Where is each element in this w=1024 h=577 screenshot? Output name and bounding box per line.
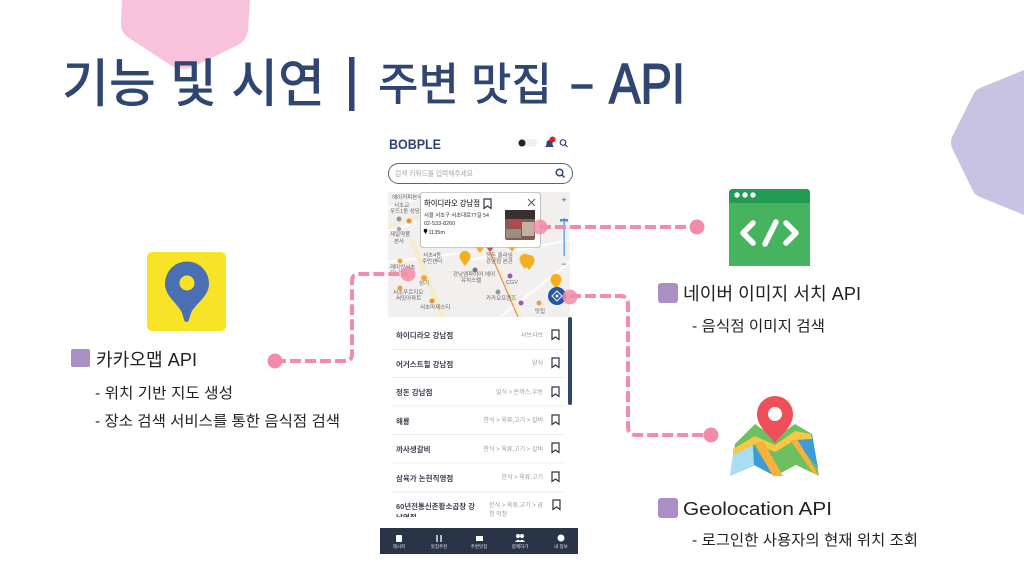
decorative purple shape xyxy=(951,70,1024,215)
text block: naver image search API: 네이버 이미지 서치 API xyxy=(683,284,861,304)
map: 제일약품 xyxy=(390,230,410,238)
restaurant list: 창 막창 xyxy=(489,510,508,518)
map: 주민센터 xyxy=(422,257,442,265)
text block: kakao map API: - 위치 기반 지도 생성 xyxy=(95,385,233,402)
place popup: 하이디라오 강남점 xyxy=(424,198,480,208)
text block: geolocation API xyxy=(658,498,918,549)
zoom slider: + xyxy=(561,195,567,205)
map: 강남엠파이어 헤어 xyxy=(453,270,495,278)
restaurant list: 정돈 강남점 xyxy=(396,387,433,397)
text block: kakao map API: - 장소 검색 서비스를 통한 음식점 검색 xyxy=(95,413,340,430)
list scrollbar xyxy=(568,317,572,405)
text block: naver image search API: - 음식점 이미지 검색 xyxy=(692,318,825,335)
arrow: naver image connector xyxy=(532,220,704,234)
restaurant list: 삼육가 논현직영점 xyxy=(396,473,453,483)
restaurant list: 한식 > 육류,고기 > 갈비 xyxy=(483,445,543,453)
map: 본사 xyxy=(394,237,404,245)
place popup: 서울 서초구 서초대로77길 54 xyxy=(424,211,489,219)
text block: naver image search API xyxy=(658,283,861,335)
place popup: 1135m xyxy=(428,230,445,236)
bottom navigation bar: 레시피 xyxy=(393,543,405,550)
app header xyxy=(389,136,568,152)
bottom navigation bar xyxy=(380,528,578,554)
zoom slider xyxy=(560,195,568,269)
map: 강남점 본관 xyxy=(486,257,513,265)
restaurant list: 일식 > 돈까스,우동 xyxy=(496,388,543,396)
map: 래미안서초 xyxy=(390,263,415,271)
text block: kakao map API: 카카오맵 API xyxy=(96,350,197,370)
map: 카카오프렌즈 xyxy=(486,294,516,302)
map: 유치스텔 xyxy=(461,276,481,284)
restaurant list: 남역점 xyxy=(396,512,417,522)
map: 헤이커피본사 xyxy=(392,193,422,201)
title: API xyxy=(609,52,685,116)
text block: kakao map API xyxy=(71,349,340,430)
restaurant list: 양식 xyxy=(532,359,543,367)
search bar xyxy=(388,164,572,184)
map: 서초마제스티 xyxy=(420,303,450,311)
map: 성기 xyxy=(419,279,429,287)
icon: code window xyxy=(729,189,810,266)
arrow: geolocation connector xyxy=(562,290,718,442)
map: 서초4동 xyxy=(423,251,441,259)
restaurant list: 까사생갈비 xyxy=(396,444,431,454)
bottom navigation bar: 맛집추천 xyxy=(431,543,447,550)
restaurant list xyxy=(392,329,565,517)
map: 써밋아파트 xyxy=(396,294,421,302)
map: 맛집 xyxy=(535,308,545,315)
app header: BOBPLE xyxy=(389,137,441,152)
map: CGV xyxy=(506,280,518,286)
restaurant list: 샤브샤브 xyxy=(521,331,543,339)
restaurant list: 한식 > 육류,고기 > 갈비 xyxy=(483,416,543,424)
restaurant list: 하이디라오 강남점 xyxy=(396,330,453,340)
bottom navigation bar: 주변맛집 xyxy=(471,543,487,550)
restaurant list: 해룡 xyxy=(396,417,410,426)
map: 서초푸르지오 xyxy=(393,288,423,296)
arrow: kakao map connector xyxy=(268,266,416,368)
icon: folded map with pin xyxy=(730,396,819,476)
panel: phone app screenshot xyxy=(380,136,578,554)
current location button xyxy=(548,287,566,305)
map xyxy=(388,192,570,317)
text block: geolocation API: - 로그인한 사용자의 현재 위치 조회 xyxy=(692,532,918,549)
title: 주변 맛집 xyxy=(378,59,552,110)
place popup xyxy=(420,192,540,248)
zoom slider: − xyxy=(561,259,567,269)
map: 서초교 xyxy=(394,201,409,209)
map: 정돈 클라임 xyxy=(486,251,513,259)
bottom navigation bar: 내 정보 xyxy=(554,543,568,550)
map: 유니빌 xyxy=(390,269,405,277)
title: 기능 및 시연 xyxy=(62,56,325,114)
place popup: 02-533-8260 xyxy=(424,221,455,227)
decorative pink shape xyxy=(121,0,250,69)
icon: kakao map xyxy=(147,252,226,331)
restaurant list: 한식 > 육류,고기 > 곱 xyxy=(489,501,543,509)
text block: geolocation API: Geolocation API xyxy=(683,499,832,519)
map: 우드1동 성당 xyxy=(390,207,420,215)
restaurant list: 한식 > 육류,고기 xyxy=(501,473,543,481)
title: – xyxy=(572,57,592,108)
bottom navigation bar: 함께하기 xyxy=(512,543,528,550)
restaurant list: 60년전통신촌황소곱창 강 xyxy=(396,501,475,511)
restaurant list: 어거스트힐 강남점 xyxy=(396,359,453,369)
search bar: 검색 키워드를 입력해주세요 xyxy=(395,168,473,178)
title xyxy=(62,52,685,116)
